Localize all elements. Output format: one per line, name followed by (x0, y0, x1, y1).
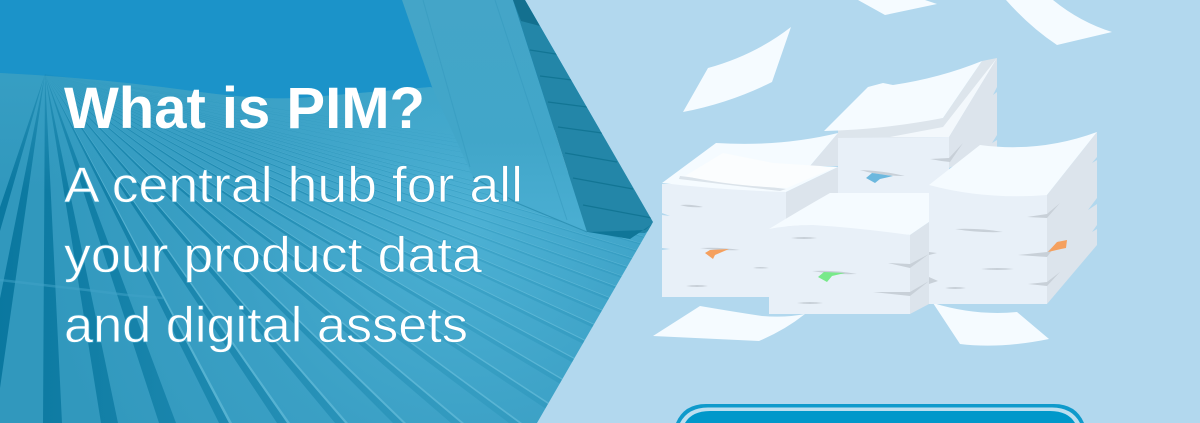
flying sheet top centre (858, 0, 937, 15)
back stack (824, 58, 997, 196)
front face (662, 184, 786, 297)
left stack (662, 133, 838, 300)
sky (0, 0, 660, 130)
light ribs (56, 96, 644, 423)
side cuts (662, 213, 670, 250)
building light face (402, 0, 587, 232)
top sheet (662, 133, 838, 192)
building top dark patch (513, 0, 540, 26)
flying sheet bottom right (933, 303, 1049, 346)
green tab (818, 272, 845, 282)
right stack (929, 132, 1097, 304)
slits (680, 205, 769, 287)
button fill (685, 411, 1075, 423)
highlighted sheet edge (890, 58, 997, 137)
button light ring (680, 408, 1080, 423)
building dark face (513, 0, 660, 233)
front face (769, 225, 910, 314)
flying sheet bottom left (653, 306, 805, 341)
subtitle line 1: A central hub for all (64, 157, 523, 213)
flying sheet left (683, 27, 791, 112)
back corner (810, 133, 838, 166)
button outer ring (676, 404, 1084, 423)
dark ribs (0, 74, 648, 423)
text block: subtitle (64, 157, 523, 353)
top sheet (769, 193, 929, 235)
side face (786, 167, 838, 300)
side face (910, 222, 929, 314)
slits (791, 237, 929, 304)
inner sheet (685, 153, 836, 188)
roof surface (0, 73, 660, 423)
side cuts (1088, 157, 1097, 232)
under sheets (838, 58, 997, 138)
slits (860, 143, 963, 176)
building tip shadow (588, 224, 652, 239)
top sheet (929, 132, 1097, 196)
building roofline shadow (473, 177, 587, 232)
title: What is PIM? (64, 76, 425, 141)
building window seams (530, 50, 652, 218)
roof cross seams (0, 280, 163, 298)
panel: building photo hexagon (0, 0, 653, 423)
side face (1047, 132, 1097, 304)
subtitle line 2: your product data (64, 227, 482, 283)
slits (929, 203, 1060, 289)
front stack (769, 193, 929, 314)
roof horizon haze (18, 76, 214, 154)
building face seams (423, 0, 567, 220)
side face (949, 58, 997, 168)
inner sheet shadow (679, 176, 786, 191)
roof ribs (0, 74, 648, 423)
side cuts (992, 87, 997, 143)
button: cropped call to action (676, 404, 1084, 423)
illustration: flying papers and stacks (653, 0, 1112, 346)
blue tab (866, 173, 893, 183)
orange tab right (1048, 240, 1067, 252)
front face (929, 185, 1047, 304)
top sheet (824, 61, 982, 131)
front face (838, 137, 949, 196)
subtitle line 3: and digital assets (64, 297, 468, 353)
flying sheet top right (1006, 0, 1112, 45)
orange tab (705, 249, 729, 259)
